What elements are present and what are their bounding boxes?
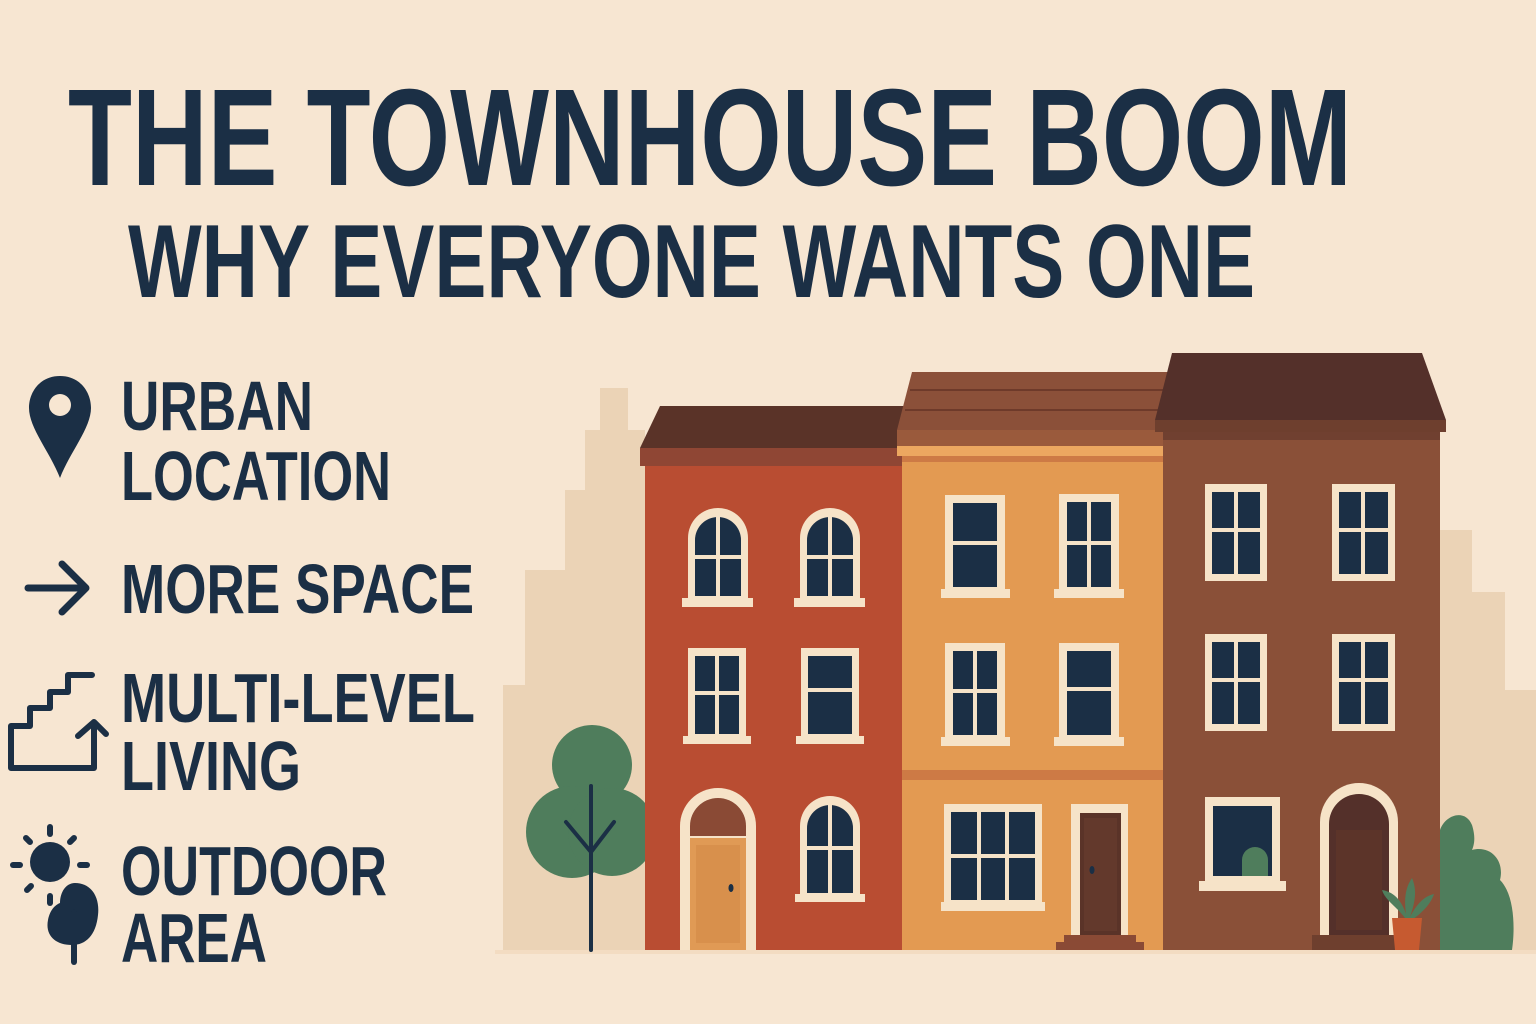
arched windows row 1	[682, 508, 865, 607]
window row 3	[1205, 797, 1280, 883]
feature list	[11, 367, 475, 977]
icon: stairs	[11, 675, 106, 768]
windows row 1	[945, 495, 1005, 593]
text: outdoor area	[121, 832, 387, 977]
icon: location pin	[29, 376, 91, 478]
text: multi-level living: LIVING	[121, 727, 301, 805]
text: outdoor area: OUTDOOR	[121, 832, 387, 910]
ground	[495, 950, 1536, 954]
building 1: red	[640, 406, 905, 950]
text: multi-level living: MULTI-LEVEL	[121, 659, 475, 737]
text: urban location: LOCATION	[121, 437, 391, 515]
tree left	[526, 725, 656, 950]
windows row 2	[688, 648, 746, 740]
arched window row 3	[800, 796, 860, 898]
text: more space: MORE SPACE	[121, 550, 474, 628]
illustration: townhouses	[495, 353, 1536, 954]
text: multi-level living	[121, 659, 475, 805]
building 2: orange	[897, 372, 1168, 950]
text: urban location	[121, 367, 391, 515]
bush right	[1440, 815, 1514, 950]
door with arch	[680, 788, 756, 950]
arched door	[1320, 783, 1398, 950]
building 3: brown	[1155, 353, 1446, 950]
icon: arrow	[28, 564, 86, 612]
icon: sun and tree	[13, 827, 98, 962]
door	[1071, 804, 1128, 936]
windows row 2	[945, 643, 1005, 741]
text: outdoor area: AREA	[121, 899, 267, 977]
background city silhouette	[503, 388, 1536, 950]
windows rows 1-2	[1205, 484, 1395, 731]
big window row 3	[944, 804, 1042, 906]
text: urban location: URBAN	[121, 367, 313, 445]
plant	[1382, 878, 1434, 950]
